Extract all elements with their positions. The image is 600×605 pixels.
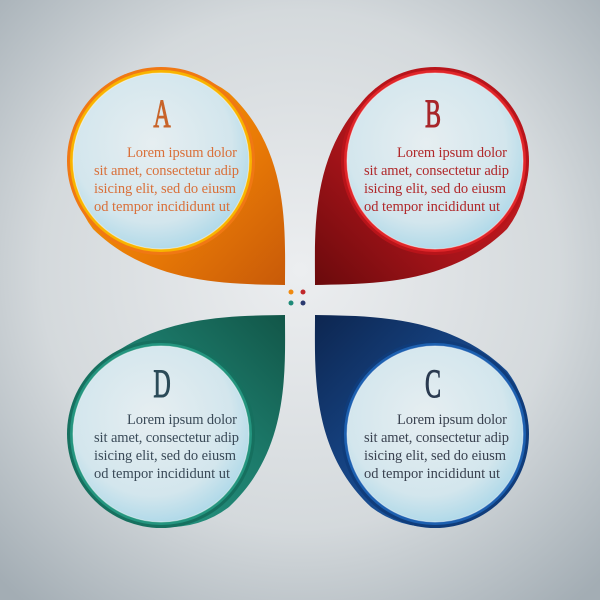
text block A: Lorem ipsum dolor	[127, 145, 237, 161]
text block B: Lorem ipsum dolor	[397, 145, 507, 161]
text block D: od tempor incididunt ut	[94, 466, 230, 482]
panel A: orange teardrop	[67, 67, 285, 285]
letter D: D	[153, 363, 171, 407]
panel B: red teardrop	[315, 67, 529, 285]
text block C: od tempor incididunt ut	[364, 466, 500, 482]
text block C: isicing elit, sed do eiusm	[364, 448, 507, 464]
text block A: od tempor incididunt ut	[94, 199, 230, 215]
text block D: Lorem ipsum dolor	[127, 412, 237, 428]
text block C: sit amet, consectetur adip	[364, 430, 509, 446]
center dots	[288, 290, 306, 306]
panel C: blue teardrop	[315, 315, 529, 528]
text block D: isicing elit, sed do eiusm	[94, 448, 237, 464]
letter C: C	[425, 363, 441, 407]
panel D: teal teardrop	[67, 315, 285, 528]
text block A: sit amet, consectetur adip	[94, 163, 239, 179]
text block B: sit amet, consectetur adip	[364, 163, 509, 179]
letter A: A	[153, 93, 171, 137]
text block A: isicing elit, sed do eiusm	[94, 181, 237, 197]
text block D: sit amet, consectetur adip	[94, 430, 239, 446]
text block B: isicing elit, sed do eiusm	[364, 181, 507, 197]
text block B: od tempor incididunt ut	[364, 199, 500, 215]
text block C: Lorem ipsum dolor	[397, 412, 507, 428]
letter B: B	[425, 93, 441, 137]
